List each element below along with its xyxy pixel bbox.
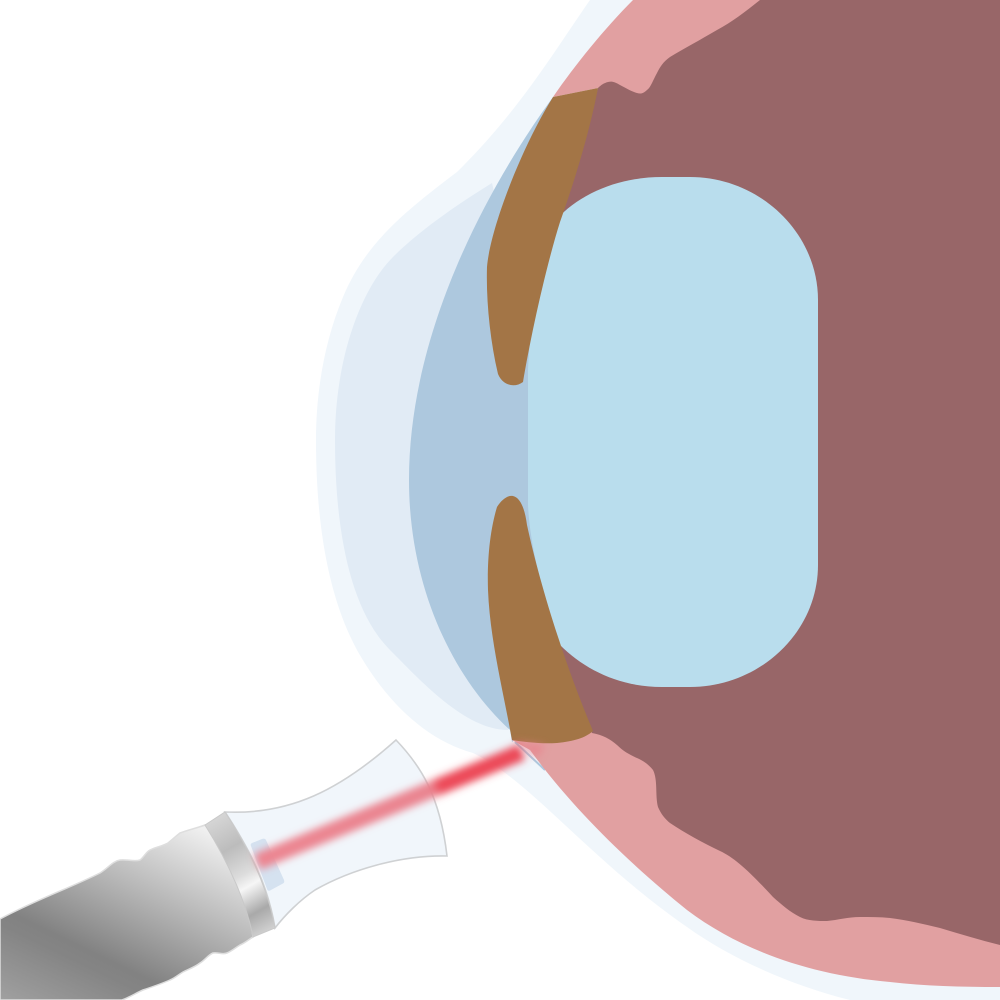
eye: cornea edge sliver [515, 742, 545, 770]
laser glow on sclera [514, 741, 545, 758]
eye: upper iris [487, 88, 598, 385]
laser probe [0, 740, 545, 1000]
eye: conjunctiva layer [335, 183, 530, 730]
eye: lens [528, 177, 818, 687]
lens mirror tab [251, 839, 284, 891]
probe handle [0, 825, 253, 1000]
eye: lower iris [488, 496, 593, 743]
eye: dark interior [555, 0, 1000, 945]
probe metal ring [205, 812, 275, 937]
eye: cornea [409, 97, 560, 742]
eye: outer tissue halo [316, 0, 1000, 1000]
eye: pink sclera [512, 0, 1000, 987]
laser beam [254, 744, 525, 870]
contact lens [225, 740, 447, 928]
